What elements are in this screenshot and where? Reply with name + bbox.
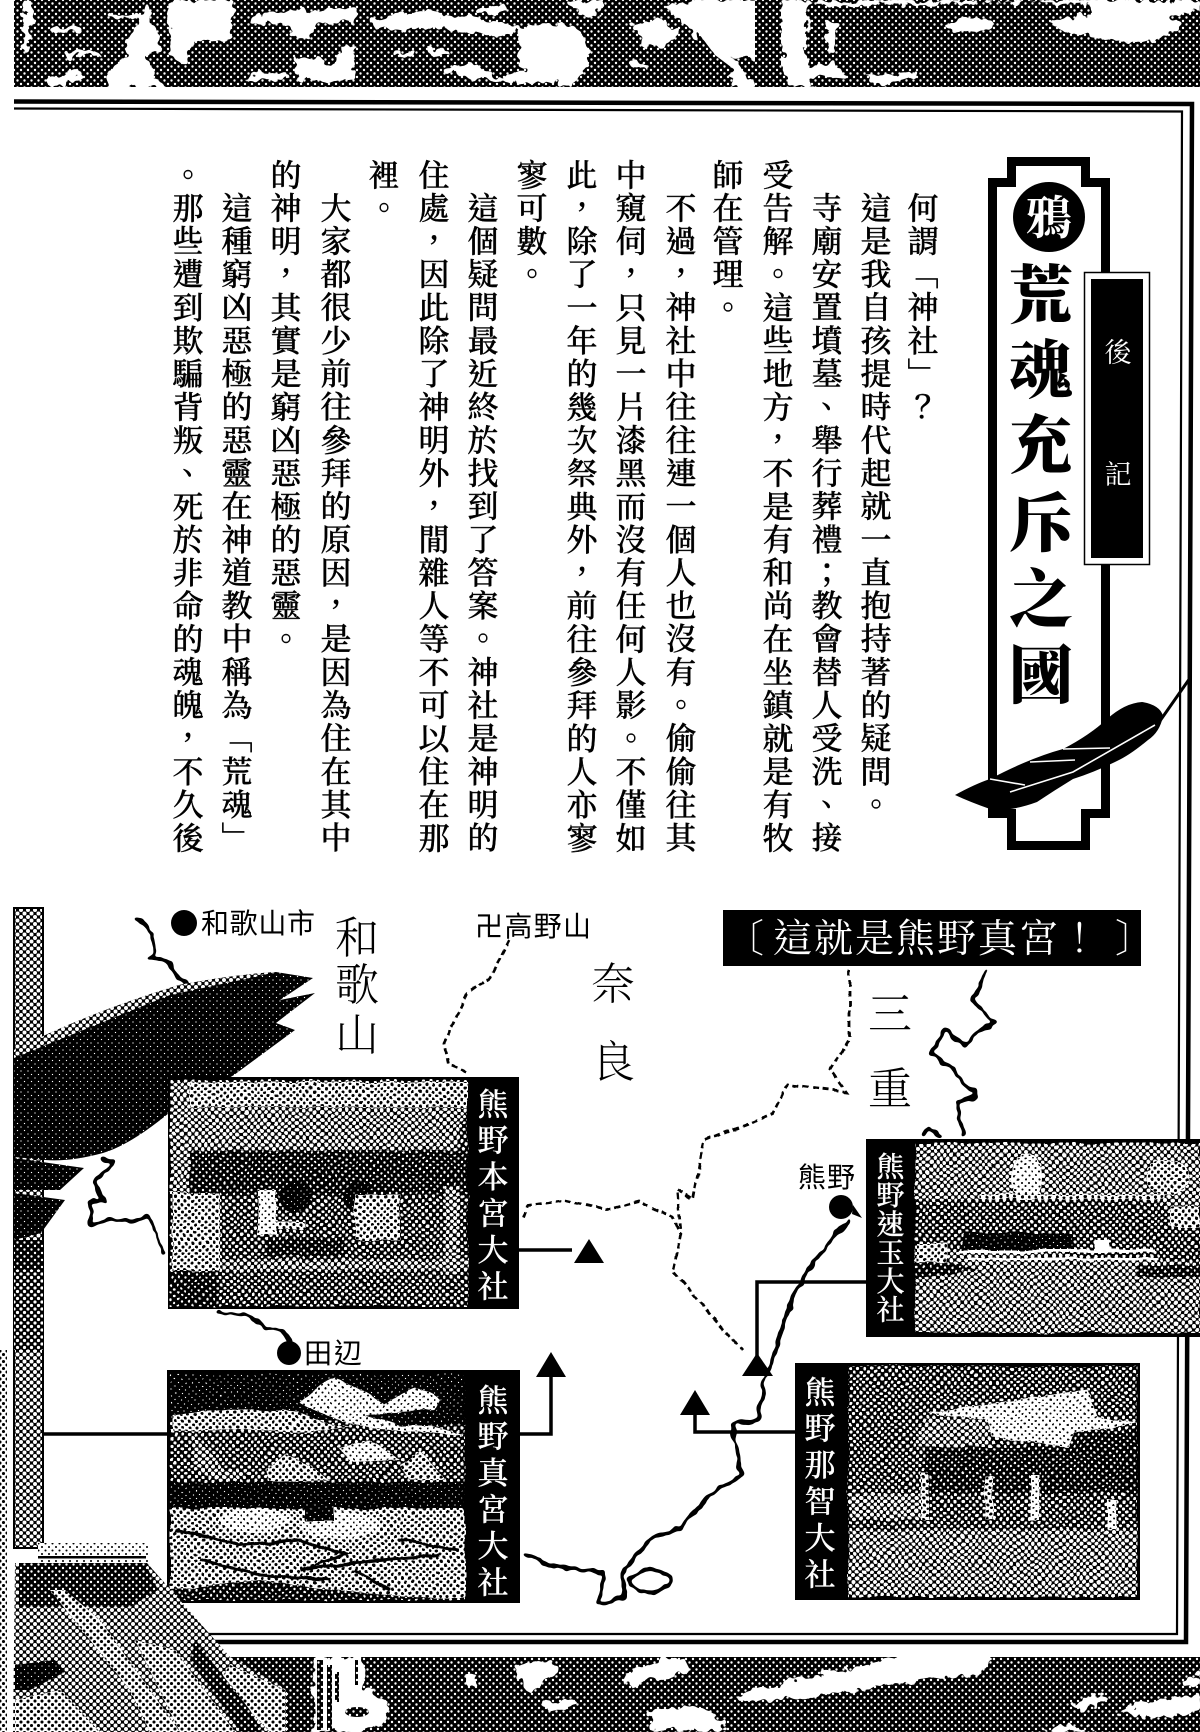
body text: vertical columns: 何謂「神社」？ (902, 192, 938, 424)
title text: 魂 (1009, 336, 1073, 407)
temple roof illustration (13, 1543, 287, 1732)
label: Nara: 良 (591, 1038, 635, 1087)
afterword tag: 記 (1104, 460, 1132, 490)
panel: Kumano Hongu Taisha (168, 1077, 519, 1309)
map place labels (171, 908, 912, 1369)
panel: Kumano Hongu Shingu (167, 1370, 520, 1603)
body text: vertical columns: 的神明，其實是窮凶惡極的惡靈。 (266, 159, 301, 656)
series badge: crow: 鴉 (1026, 193, 1072, 244)
label: Kumano: 熊野 (798, 1162, 855, 1193)
title text: 斥 (1009, 489, 1077, 560)
label: Kumano (798, 1162, 862, 1219)
label: Wakayama prefecture: 山 (335, 1011, 379, 1060)
title text: 國 (1009, 641, 1073, 712)
panel: Kumano Hayatama Taisha (866, 1139, 1200, 1337)
afterword tag: 後 (1104, 338, 1132, 368)
label: Mie (868, 990, 912, 1114)
body text: vertical columns: 受告解。這些地方，不是有和尚在坐鎮就是有牧 (758, 159, 793, 855)
connectors and triangle markers (43, 1239, 866, 1434)
label: Mount Koya: 卍高野山 (475, 911, 591, 942)
title text: 之 (1009, 565, 1073, 636)
label: Wakayama prefecture (335, 914, 379, 1060)
label: Wakayama prefecture: 歌 (335, 961, 379, 1010)
body text: vertical columns (168, 159, 938, 855)
label: Mie: 三 (868, 990, 912, 1039)
body text: vertical columns: 裡。 (364, 159, 398, 225)
body text: vertical columns: 這個疑問最近終於找到了答案。神社是神明的 (462, 192, 498, 855)
banner: this is Kumano shrine (723, 910, 1154, 966)
body text: vertical columns: 住處，因此除了神明外，閒雜人等不可以住在那 (414, 159, 449, 855)
prefecture border dotted lines (444, 940, 849, 1350)
body text: vertical columns: 這是我自孩提時代起就一直抱持著的疑問。 (856, 192, 891, 822)
body text: vertical columns: 這種窮凶惡極的惡靈在神道教中稱為「荒魂」 (216, 192, 252, 855)
icon: feather (955, 678, 1190, 810)
title cartouche (955, 162, 1190, 846)
body text: vertical columns: 師在管理。 (708, 159, 743, 325)
bottom halftone photo band (230, 1652, 1200, 1732)
panel caption: 熊野那智大社 (800, 1376, 835, 1594)
body text: vertical columns: 不過，神社中往往連一個人也沒有。偷偷往其 (660, 192, 696, 855)
banner: this is Kumano shrine: 〕 (1115, 918, 1154, 961)
panel caption: 熊野速玉大社 (872, 1152, 904, 1324)
title text: 充 (1009, 411, 1073, 482)
label: Wakayama prefecture: 和 (335, 914, 379, 963)
afterword tag (1084, 272, 1150, 564)
body text: vertical columns: 寥可數。 (512, 159, 546, 292)
body text: vertical columns: 此，除了一年的幾次祭典外，前往參拜的人亦寥 (562, 159, 597, 855)
label: Nara: 奈 (591, 960, 635, 1009)
body text: vertical columns: 大家都很少前往參拜的原因，是因為住在其中 (316, 192, 351, 855)
panel: Kumano Nachi Taisha (795, 1363, 1140, 1600)
banner: this is Kumano shrine: 〔 (725, 918, 764, 961)
label: Tanabe: 田辺 (304, 1338, 362, 1369)
label: Nara (591, 960, 635, 1087)
series badge: crow (1013, 182, 1085, 252)
banner: this is Kumano shrine: 這就是熊野真宮！ (773, 918, 1101, 961)
photo: Hayatama shrine (915, 1143, 1200, 1333)
title text (1009, 261, 1077, 712)
rivers and coastline (90, 918, 993, 1605)
title text: 荒 (1009, 261, 1073, 332)
left vertical halftone strip (0, 908, 43, 1732)
crow wing illustration (14, 972, 315, 1240)
photo: Shingu landscape (170, 1373, 465, 1600)
body text: vertical columns: 寺廟安置墳墓、舉行葬禮；教會替人受洗、接 (806, 192, 842, 855)
panel caption: 熊野真宮大社 (472, 1384, 508, 1602)
body text: vertical columns: 中窺伺，只見一片漆黑而沒有任何人影。不僅如 (610, 159, 646, 855)
photo: Hongu shrine (170, 1080, 468, 1306)
photo: Nachi shrine (848, 1366, 1137, 1597)
label: Mie: 重 (868, 1065, 912, 1114)
panel caption: 熊野本宮大社 (472, 1088, 508, 1306)
top halftone photo band (14, 0, 1200, 88)
body text: vertical columns: 。那些遭到欺騙背叛、死於非命的魂魄，不久後 (168, 159, 204, 855)
label: Wakayama city: 和歌山市 (201, 908, 315, 939)
label: Tanabe (277, 1338, 362, 1369)
